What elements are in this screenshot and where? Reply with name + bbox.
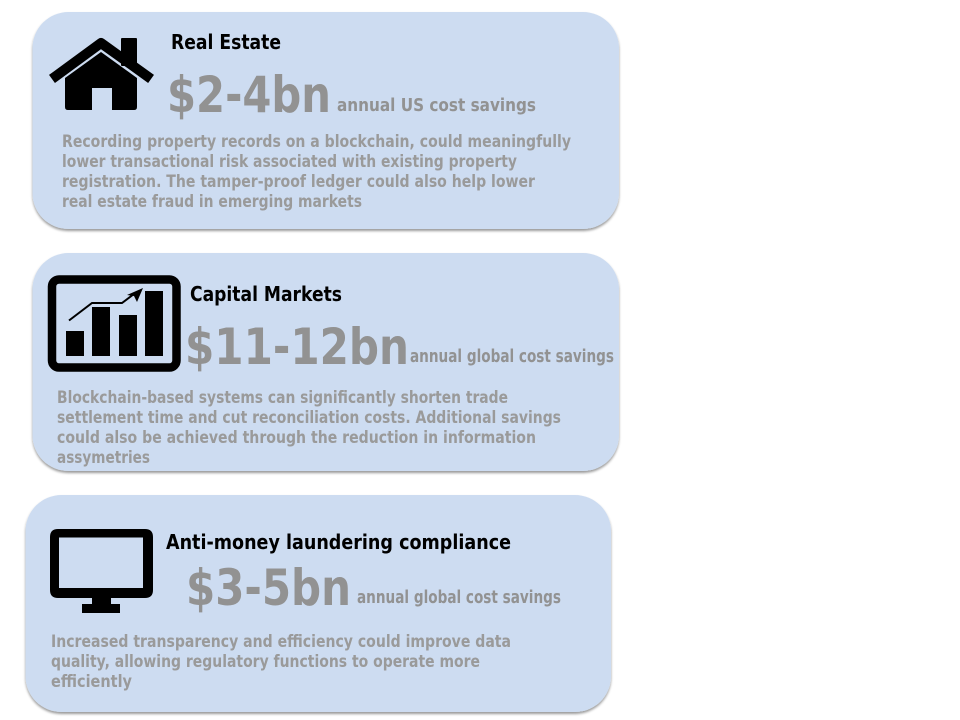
card background [32,12,619,229]
description: Recording property records on a blockchain, could meaningfully [62,132,571,152]
savings label: annual global cost savings [357,588,561,608]
description: Blockchain-based systems can significantly shorten trade [57,388,508,408]
description: real estate fraud in emerging markets [62,192,362,212]
savings label: annual global cost savings [410,347,614,367]
description: registration. The tamper-proof ledger could also help lower [62,172,536,192]
icon: monitor [50,529,153,613]
savings label: annual US cost savings [337,96,536,116]
description: assymetries [57,448,150,468]
description: Increased transparency and efficiency could improve data [51,632,511,652]
card background [32,253,619,471]
heading: Capital Markets [190,282,342,306]
big number: $3-5bn [186,559,351,617]
description: could also be achieved through the reduction in information [57,428,536,448]
description [51,632,511,692]
panel: anti-money laundering [26,495,611,712]
panel: real estate [32,12,619,229]
description: settlement time and cut reconciliation costs. Additional savings [57,408,561,428]
panel: capital markets [32,253,619,471]
description: lower transactional risk associated with existing property [62,152,517,172]
heading: Real Estate [171,30,281,54]
description: efficiently [51,672,132,692]
card background [26,495,611,712]
big number: $2-4bn [167,66,331,124]
description [62,132,571,212]
icon: chart on screen [52,280,176,368]
heading: Anti-money laundering compliance [166,530,511,554]
big number: $11-12bn [185,318,409,376]
icon: house [56,38,147,110]
description: quality, allowing regulatory functions to operate more [51,652,480,672]
description [57,388,561,468]
